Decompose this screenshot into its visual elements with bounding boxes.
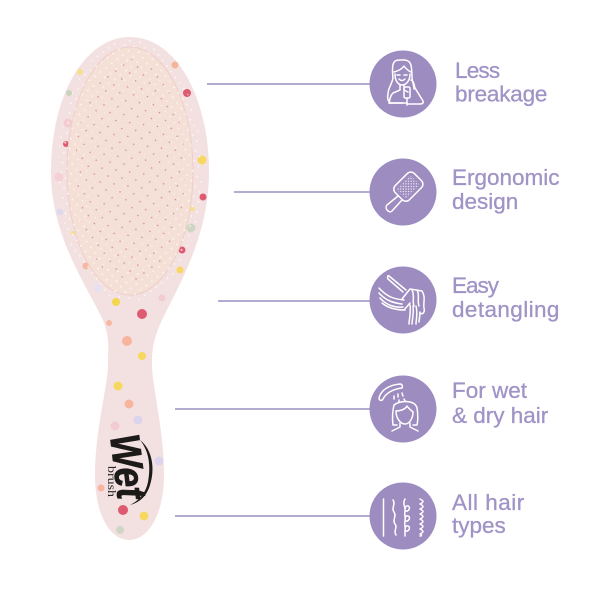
icon: hair texture lines <box>370 482 436 550</box>
icon: woman brushing hair <box>370 50 436 118</box>
label: breakage <box>455 82 547 106</box>
label: detangling <box>452 297 560 322</box>
Wet brush logo: brush <box>105 466 119 497</box>
label: Easy <box>452 273 500 298</box>
cushion pad <box>67 47 193 295</box>
icon: hand detangling hair <box>370 266 436 334</box>
label: types <box>452 513 506 538</box>
brush <box>50 35 210 540</box>
benefit: easy detangling <box>370 266 560 334</box>
icon: shower over head <box>370 376 436 442</box>
icon: paddle brush <box>370 158 436 226</box>
label: For wet <box>452 378 528 403</box>
bristles <box>58 40 202 300</box>
benefit: all hair types <box>370 482 525 550</box>
label: Ergonomic <box>452 165 560 190</box>
benefit: for wet and dry hair <box>370 376 549 442</box>
Wet brush logo: Wet <box>101 431 156 503</box>
brush body <box>51 37 209 540</box>
benefit: less breakage <box>370 50 547 118</box>
connector lines <box>175 84 372 516</box>
label: All hair <box>452 490 525 515</box>
label: design <box>452 189 518 214</box>
label: & dry hair <box>452 403 549 428</box>
label: Less <box>455 58 500 83</box>
polka dots <box>54 62 206 534</box>
benefit: ergonomic design <box>370 158 560 226</box>
